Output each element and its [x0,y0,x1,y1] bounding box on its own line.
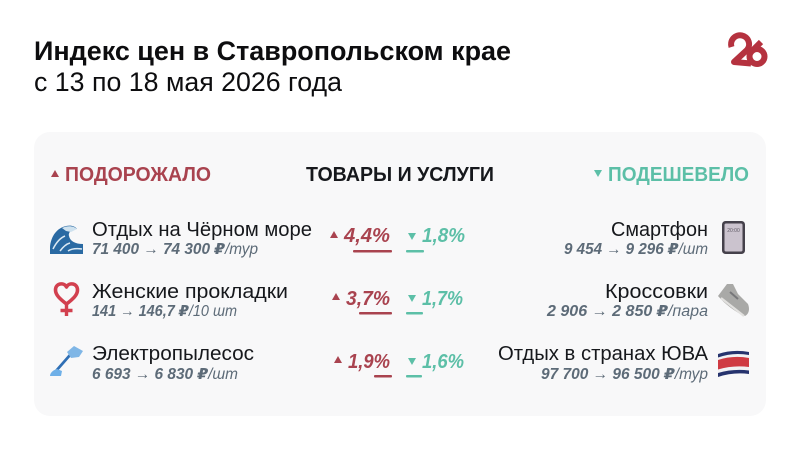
item: sanitary pads: 141 → 146,7 ₽/10 шт [92,303,237,320]
item: sneakers: 2 906 → 2 850 ₽ /пара [546,303,708,320]
subtitle: с 13 по 18 мая 2026 года [34,67,342,97]
item: vacation in Southeast Asia: 97 700 → 96 500 ₽/тур [541,366,708,383]
change row 1: 4,4% [343,225,390,247]
change row 3 [334,351,464,378]
item: vacation on the Black Sea: 71 400 → 74 300 ₽/тур [92,241,258,258]
change row 3: 1,9% [348,351,390,373]
icon: Costa Rica flag [718,351,749,377]
item: vacation in Southeast Asia: Отдых в странах ЮВА [498,343,709,365]
change row 2: 3,7% [346,288,390,310]
item: sneakers: Кроссовки [605,281,708,303]
icon: smartphone: 20:00 [727,228,740,234]
item: vacation on the Black Sea: Отдых на Чёрном море [92,219,312,241]
heading: became more expensive: ПОДОРОЖАЛО [65,164,211,186]
heading: became cheaper: ПОДЕШЕВЕЛО [608,164,749,186]
logo: 26 [731,35,764,64]
icon: wave [50,226,83,254]
heading: goods and services: ТОВАРЫ И УСЛУГИ [306,164,494,186]
item: vacuum cleaner [92,343,254,383]
change row 1: 1,8% [422,225,465,247]
item: smartphone: 9 454 → 9 296 ₽/шт [564,241,708,258]
item: sanitary pads: Женские прокладки [92,281,288,303]
icon: smartphone [722,221,745,254]
item: vacuum cleaner: 6 693 → 6 830 ₽/шт [92,366,238,383]
title: Индекс цен в Ставропольском крае [34,36,511,66]
change row 2 [332,288,463,314]
item: smartphone [564,219,708,258]
panel: price index [34,132,766,416]
item: smartphone: Смартфон [611,219,708,241]
item: sanitary pads [92,281,288,320]
change row 1 [330,225,465,252]
icon: female sign heart [56,284,78,316]
item: vacuum cleaner: Электропылесос [92,343,254,365]
icon: vacuum cleaner [50,346,83,376]
change row 3: 1,6% [422,351,464,373]
item: vacation on the Black Sea [92,219,312,258]
icon: sneaker [718,284,749,316]
item: sneakers [546,281,708,320]
item: vacation in Southeast Asia [498,343,709,383]
change row 2: 1,7% [422,288,463,310]
